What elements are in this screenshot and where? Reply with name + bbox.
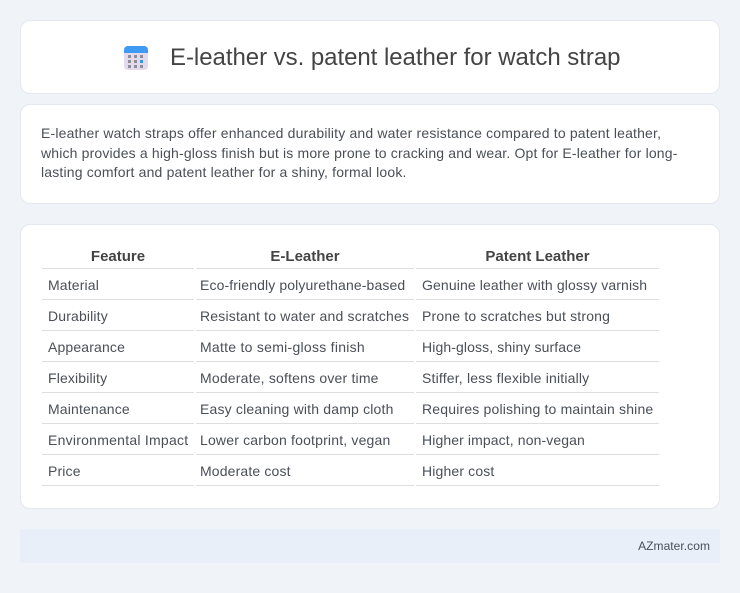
comparison table: Prone to scratches but strong [422, 308, 610, 324]
summary text [41, 125, 678, 180]
summary text: which provides a high-gloss finish but is more prone to cracking and wear. Opt for E-leather for long- [41, 144, 678, 160]
summary text: lasting comfort and patent leather for a shiny, formal look. [41, 164, 407, 180]
panel: summary [20, 104, 720, 204]
comparison table: Higher cost [422, 463, 494, 479]
footer: source: AZmater.com [638, 539, 710, 553]
comparison table: Genuine leather with glossy varnish [422, 277, 647, 293]
comparison table: Matte to semi-gloss finish [200, 339, 365, 355]
row: Flexibility: Flexibility [48, 370, 107, 386]
comparison table: Stiffer, less flexible initially [422, 370, 589, 386]
comparison table: Moderate cost [200, 463, 291, 479]
comparison table: Resistant to water and scratches [200, 308, 409, 324]
header: Feature: Feature [91, 248, 145, 265]
comparison table: Eco-friendly polyurethane-based [200, 277, 405, 293]
comparison table: Requires polishing to maintain shine [422, 401, 653, 417]
title: E-leather vs. patent leather for watch strap [170, 44, 620, 71]
summary text: E-leather watch straps offer enhanced durability and water resistance compared to patent leather, [41, 125, 661, 141]
row: Durability: Durability [48, 308, 108, 324]
row: Environmental Impact: Environmental Impact [48, 432, 188, 448]
header: Patent Leather: Patent Leather [485, 248, 590, 265]
icon: calendar [124, 46, 148, 70]
comparison table: Lower carbon footprint, vegan [200, 432, 390, 448]
row: Maintenance: Maintenance [48, 401, 130, 417]
header: E-Leather: E-Leather [270, 248, 340, 265]
comparison table: Easy cleaning with damp cloth [200, 401, 394, 417]
row: Material: Material [48, 277, 99, 293]
comparison table: Moderate, softens over time [200, 370, 379, 386]
panel: comparison table [20, 224, 720, 509]
comparison table: High-gloss, shiny surface [422, 339, 581, 355]
row: Price: Price [48, 463, 81, 479]
panel: title card [20, 20, 720, 94]
row: Appearance: Appearance [48, 339, 125, 355]
comparison table [42, 248, 659, 486]
comparison table: Higher impact, non-vegan [422, 432, 585, 448]
footer bar [20, 529, 720, 563]
